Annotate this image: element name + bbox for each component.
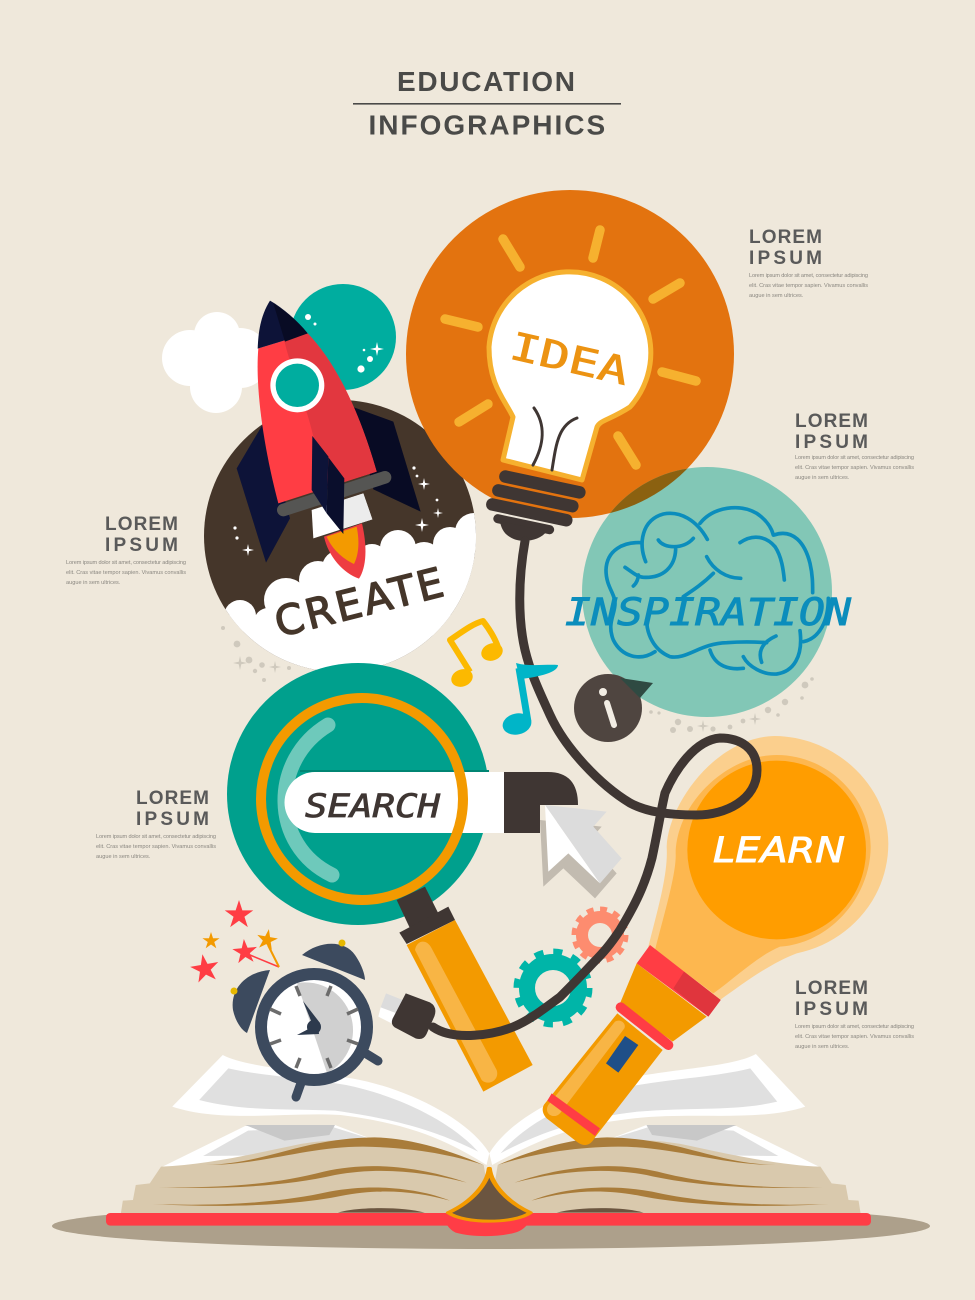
usb plug	[392, 994, 435, 1038]
circle: small teal planet	[290, 284, 396, 390]
text block: learn: IPSUM	[795, 999, 871, 1020]
left fin	[237, 423, 290, 563]
text block: learn: augue in sem ultrices.	[795, 1044, 850, 1050]
text block: top right: elit. Cras vitae tempor sapien. Vivamus convallis	[749, 283, 868, 289]
stars	[188, 900, 279, 983]
bar	[283, 477, 385, 510]
text block: create: elit. Cras vitae tempor sapien. Vivamus convallis	[66, 570, 186, 576]
flashlight glow	[648, 736, 888, 1000]
text block: top right: Lorem ipsum dolor sit amet, consectetur adipiscing	[749, 273, 868, 279]
ring	[261, 974, 367, 1080]
cord	[433, 541, 757, 1036]
text block: top right: augue in sem ultrices.	[749, 293, 804, 299]
text block: inspiration: LOREM	[795, 411, 869, 432]
cloud	[162, 312, 270, 413]
text block: learn: Lorem ipsum dolor sit amet, consectetur adipiscing	[795, 1024, 914, 1030]
CREATE label: CREATE	[270, 559, 448, 647]
bulb glass	[489, 272, 651, 480]
center fin	[312, 436, 328, 513]
text block: inspiration: Lorem ipsum dolor sit amet, consectetur adipiscing	[795, 455, 914, 461]
title: INFOGRAPHICS	[368, 110, 607, 140]
flame	[324, 523, 365, 579]
LEARN label: LEARN	[713, 831, 845, 871]
blue switch	[606, 1036, 638, 1073]
music note: yellow	[449, 621, 505, 690]
rocket	[237, 301, 421, 579]
decorative dots: create	[221, 626, 291, 682]
window	[270, 358, 324, 412]
usb plug prongs	[378, 993, 403, 1023]
text block: inspiration: IPSUM	[795, 432, 871, 453]
face	[266, 979, 362, 1075]
brain	[606, 508, 828, 674]
cursor	[540, 805, 622, 898]
text block: top right	[749, 227, 868, 299]
magnifier ring	[261, 698, 463, 900]
sparkles	[233, 466, 443, 556]
text block: search: augue in sem ultrices.	[96, 854, 151, 860]
page block left	[121, 1137, 492, 1215]
legs	[296, 1083, 301, 1097]
text block: create: augue in sem ultrices.	[66, 580, 121, 586]
nose	[258, 301, 308, 349]
screw base	[480, 468, 587, 552]
text block: search: LOREM	[136, 788, 210, 809]
book shadow	[52, 1203, 930, 1249]
rays	[445, 230, 696, 465]
ticks	[270, 986, 358, 1068]
text block: inspiration	[795, 411, 914, 481]
flying page left	[172, 1055, 489, 1165]
red band top	[637, 945, 721, 1017]
text block: search: elit. Cras vitae tempor sapien. Vivamus convallis	[96, 844, 216, 850]
text block: search: IPSUM	[136, 809, 212, 830]
text block: search: Lorem ipsum dolor sit amet, consectetur adipiscing	[96, 834, 216, 840]
text block: create: Lorem ipsum dolor sit amet, consectetur adipiscing	[66, 560, 186, 566]
spine centre	[448, 1168, 530, 1221]
text block: top right: LOREM	[749, 227, 823, 248]
red band bottom	[547, 1093, 600, 1136]
tube	[543, 1013, 663, 1145]
back pages right	[607, 1125, 820, 1167]
magnifier handle	[397, 887, 533, 1092]
hands	[297, 1001, 320, 1035]
text block: create: LOREM	[105, 514, 179, 535]
circle: create	[204, 400, 476, 670]
circle: inspiration	[566, 467, 852, 717]
info bubble	[574, 674, 653, 742]
text block: learn: LOREM	[795, 978, 869, 999]
INSPIRATION label: INSPIRATION	[565, 591, 852, 634]
text block: top right: IPSUM	[749, 248, 825, 269]
text block: create: IPSUM	[105, 535, 181, 556]
flying page right	[489, 1054, 805, 1165]
alarm clock	[230, 940, 378, 1097]
gear: salmon	[574, 909, 626, 961]
lens highlight	[285, 725, 332, 875]
back pages left	[161, 1125, 374, 1167]
SEARCH label: SEARCH	[305, 787, 441, 825]
nozzle	[312, 493, 372, 538]
circle: search	[227, 663, 489, 925]
flashlight	[543, 945, 721, 1145]
circle: idea	[406, 190, 734, 518]
title	[353, 66, 621, 140]
text block: learn	[795, 978, 914, 1050]
music note: cyan	[501, 663, 558, 737]
open book	[106, 1054, 871, 1236]
title: EDUCATION	[397, 66, 577, 97]
text block: inspiration: elit. Cras vitae tempor sapien. Vivamus convallis	[795, 465, 914, 471]
text block: search	[96, 788, 216, 860]
page block right	[489, 1137, 861, 1215]
text block: learn: elit. Cras vitae tempor sapien. Vivamus convallis	[795, 1034, 914, 1040]
smoke cloud	[226, 513, 476, 670]
search bar	[284, 770, 578, 833]
red ring	[621, 1007, 668, 1045]
gear: teal	[517, 952, 589, 1024]
red spine	[106, 1213, 871, 1236]
decorative dots: inspiration	[649, 677, 814, 733]
text block: inspiration: augue in sem ultrices.	[795, 475, 850, 481]
light bulb	[480, 272, 651, 552]
bells	[302, 944, 365, 980]
filament	[533, 408, 577, 470]
text block: create	[66, 514, 186, 586]
right fin	[354, 407, 421, 512]
body	[258, 333, 377, 503]
head	[620, 963, 707, 1042]
IDEA label: IDEA	[506, 324, 633, 394]
